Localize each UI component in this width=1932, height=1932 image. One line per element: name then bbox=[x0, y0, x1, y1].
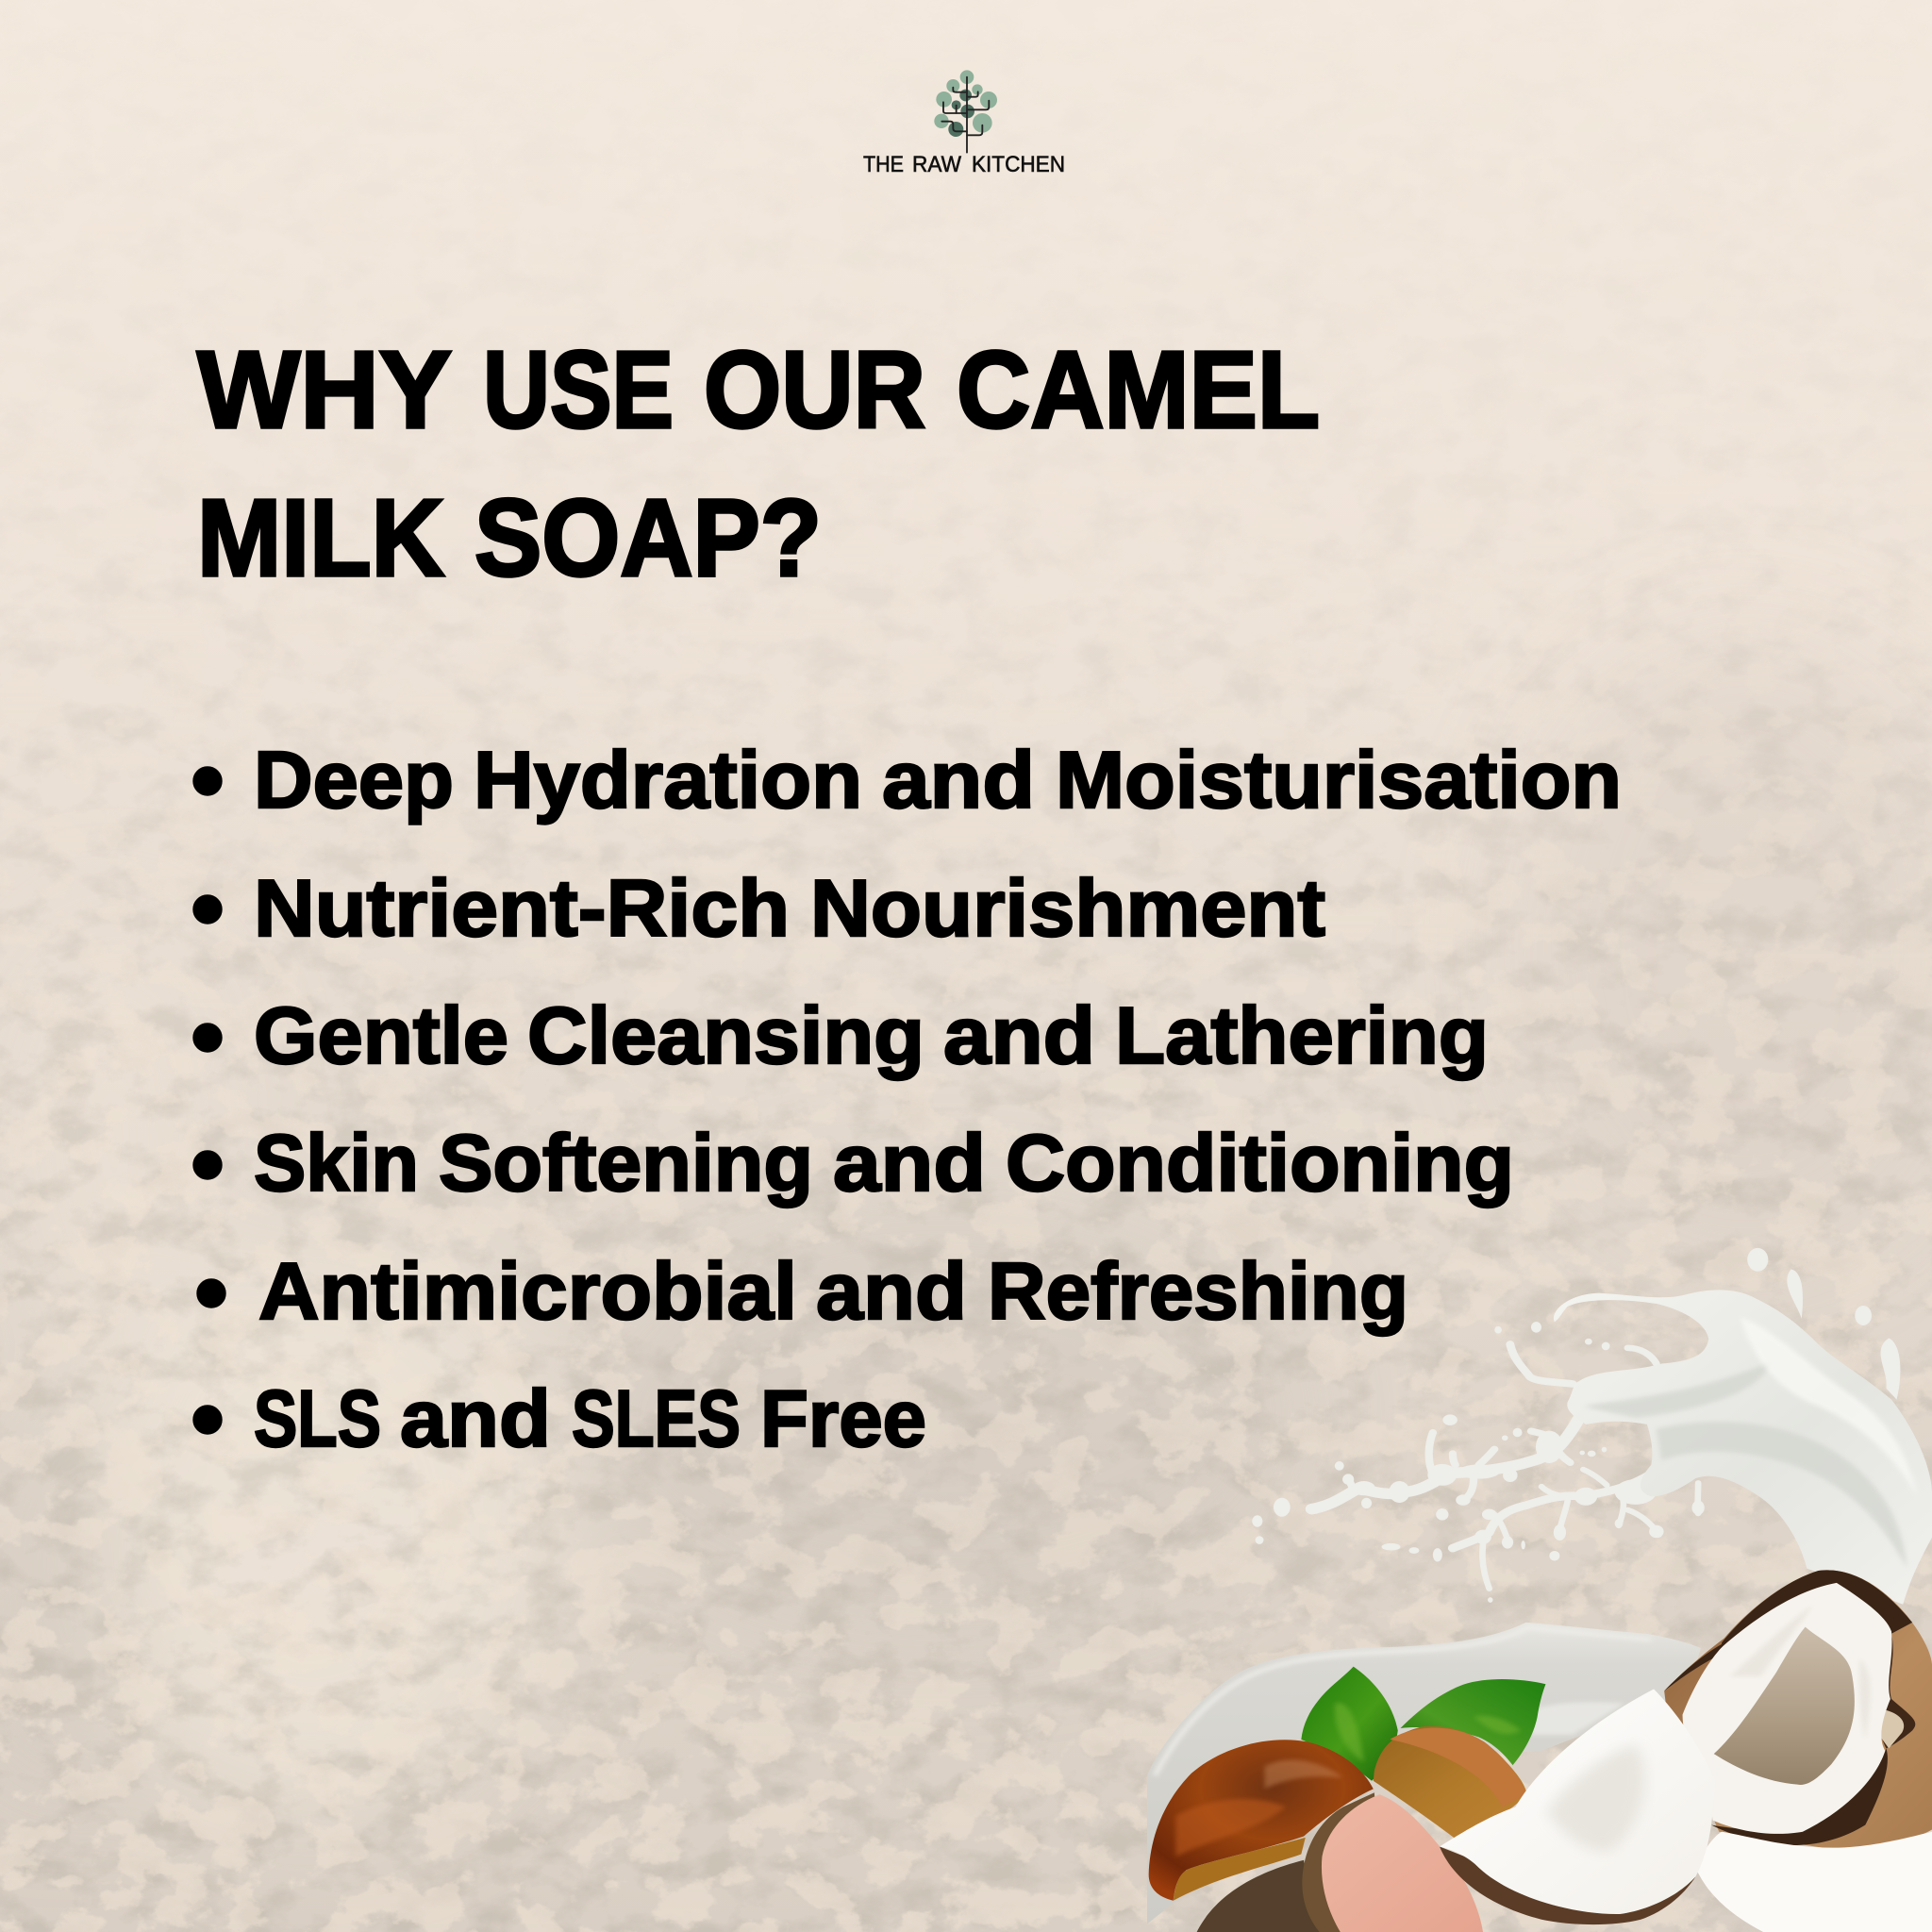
item: skin softening: Skin bbox=[254, 1119, 419, 1208]
item: skin softening: Conditioning bbox=[1006, 1119, 1514, 1208]
item: deep hydration: and bbox=[882, 736, 1035, 825]
item: sls free bbox=[194, 1374, 926, 1464]
item: gentle cleansing: and bbox=[943, 991, 1095, 1081]
leaves bbox=[1301, 1667, 1545, 1781]
title: CAMEL bbox=[957, 328, 1320, 451]
item: nutrient-rich: Nourishment bbox=[810, 864, 1325, 954]
item: sls free: SLS bbox=[254, 1374, 381, 1464]
title: MILK bbox=[197, 476, 444, 599]
title bbox=[197, 328, 1320, 599]
item: gentle cleansing bbox=[194, 991, 1489, 1081]
title: SOAP? bbox=[475, 476, 822, 599]
golden nut bbox=[1374, 1726, 1527, 1840]
title: USE bbox=[483, 328, 674, 451]
item: antimicrobial bbox=[198, 1247, 1408, 1337]
milk splash bbox=[1252, 1248, 1932, 1605]
item: sls free: Free bbox=[760, 1374, 926, 1464]
coconut piece bottom right bbox=[1695, 1832, 1932, 1932]
item: skin softening bbox=[194, 1119, 1514, 1208]
coconut wedge bbox=[1440, 1689, 1715, 1924]
illustration: milk, nuts and coconut bbox=[1147, 1248, 1932, 1932]
item: deep hydration bbox=[194, 736, 1622, 825]
item: antimicrobial: Refreshing bbox=[988, 1247, 1408, 1337]
item: deep hydration: Moisturisation bbox=[1056, 736, 1622, 825]
logo: The Raw Kitchen bbox=[863, 70, 1065, 177]
item: gentle cleansing: Gentle bbox=[254, 991, 508, 1081]
item: antimicrobial: Antimicrobial bbox=[258, 1247, 797, 1337]
pink nut bbox=[1302, 1792, 1483, 1932]
title: OUR bbox=[704, 328, 925, 451]
item: deep hydration: Deep bbox=[254, 736, 454, 825]
item: nutrient-rich: Nutrient-Rich bbox=[254, 864, 790, 954]
item: gentle cleansing: Lathering bbox=[1115, 991, 1489, 1081]
title: WHY bbox=[197, 328, 452, 451]
logo wordmark: THE bbox=[863, 152, 904, 177]
logo wordmark: RAW bbox=[912, 152, 961, 177]
item: sls free: SLES bbox=[572, 1374, 741, 1464]
item: gentle cleansing: Cleansing bbox=[527, 991, 924, 1081]
logo wordmark bbox=[863, 152, 1065, 177]
brown nut bbox=[1149, 1740, 1374, 1901]
item: antimicrobial: and bbox=[816, 1247, 967, 1337]
benefits list bbox=[194, 736, 1622, 1464]
item: skin softening: and bbox=[833, 1119, 986, 1208]
item: skin softening: Softening bbox=[439, 1119, 813, 1208]
dark nut bbox=[1197, 1860, 1322, 1932]
coconut half bbox=[1664, 1570, 1932, 1851]
logo wordmark: KITCHEN bbox=[972, 152, 1065, 177]
item: deep hydration: Hydration bbox=[474, 736, 862, 825]
item: nutrient-rich bbox=[194, 864, 1325, 954]
cream swoosh bbox=[1147, 1623, 1701, 1924]
icon: tree bbox=[934, 70, 997, 153]
item: sls free: and bbox=[400, 1374, 551, 1464]
